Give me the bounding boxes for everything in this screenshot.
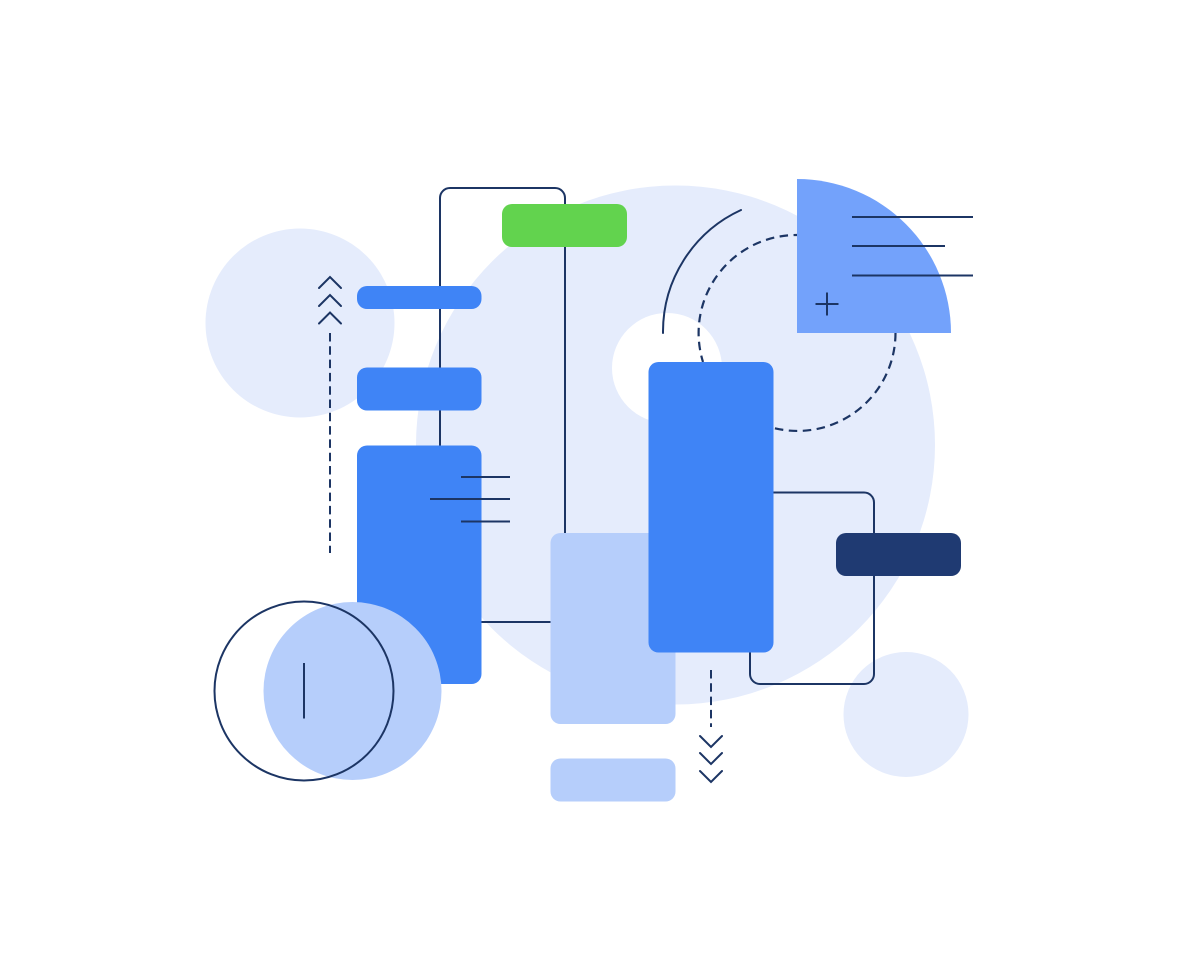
quarter circle with text lines: [797, 179, 973, 333]
background circle: left: [206, 228, 394, 418]
bar: tall blue right: [648, 362, 774, 652]
outline circle: [214, 602, 394, 780]
bar: thin blue pill: [357, 286, 482, 309]
background circle: large center: [416, 186, 935, 704]
arc: dashed circle: [699, 235, 896, 431]
arrow: dashed up: [319, 277, 341, 553]
background circle: bottom right: [844, 652, 968, 777]
bar: short blue: [357, 368, 482, 410]
overlapping circles: [214, 602, 442, 780]
vertical mark: [303, 663, 305, 718]
quarter circle lines: [852, 217, 973, 276]
tick lines on left bar: [430, 477, 510, 522]
filled pale circle: [264, 602, 442, 780]
bar: pale blue center: [550, 533, 676, 724]
connector: lower left line: [481, 621, 551, 623]
bar: dark navy: [836, 533, 961, 576]
bar: tall blue left: [357, 446, 482, 684]
arrow: dashed down: [700, 670, 722, 782]
arc: solid curve: [663, 210, 741, 333]
bar: green top: [502, 204, 627, 247]
connector: top rounded frame: [440, 188, 565, 534]
bar: pale blue bottom: [550, 758, 676, 802]
connector: right rounded frame: [750, 492, 874, 684]
white circle: center: [612, 313, 722, 423]
icon: plus: [816, 292, 838, 316]
